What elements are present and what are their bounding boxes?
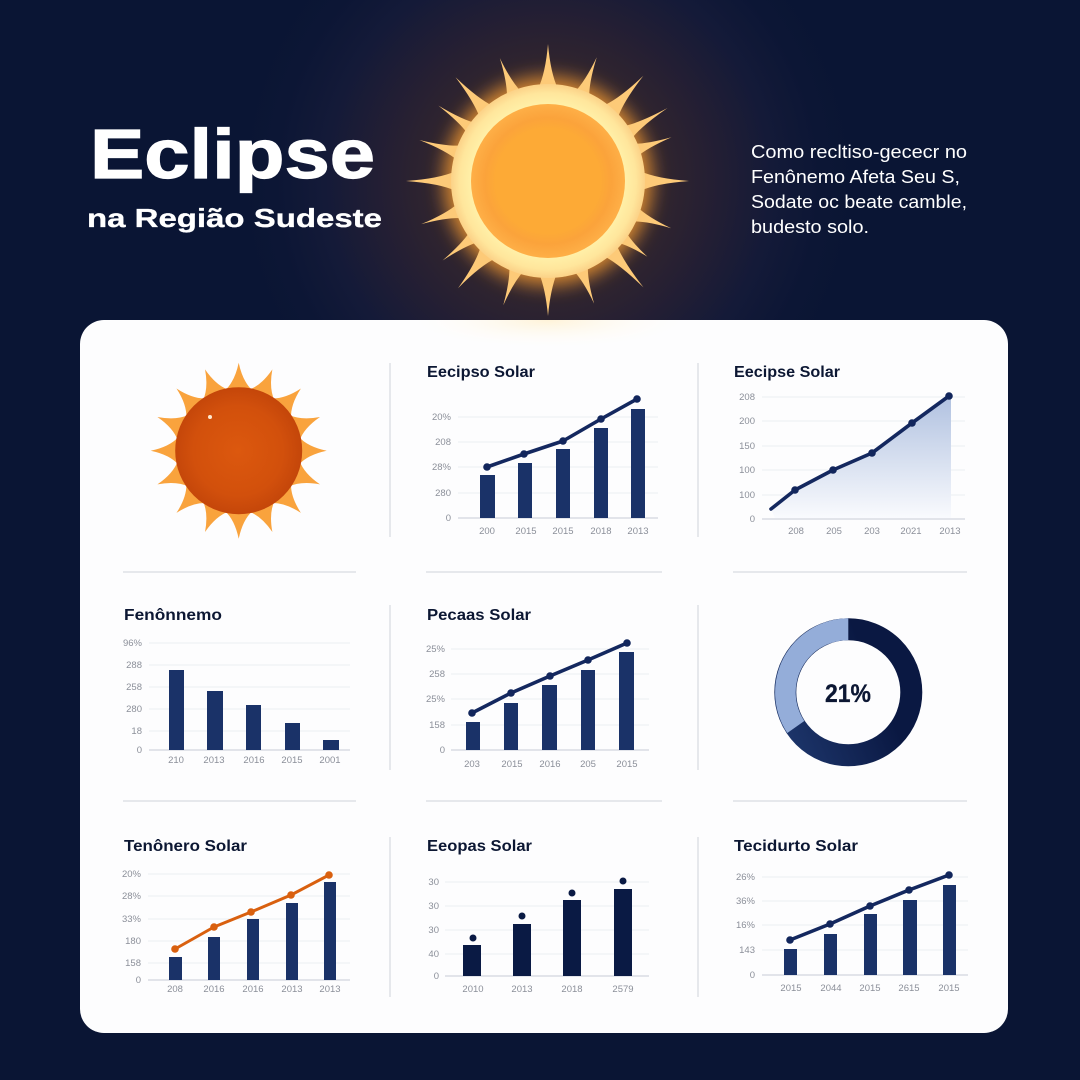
y axis labels: 280 (435, 488, 451, 499)
y axis labels: 0 (446, 513, 451, 524)
x axis labels: 2015 (501, 759, 523, 770)
chart title: Eecipso Solar (427, 364, 535, 381)
y axis labels: 0 (136, 975, 141, 986)
x axis labels: 2016 (539, 759, 561, 770)
subtitle: na Região Sudeste (87, 203, 382, 233)
chart: Tecidurto Solar (734, 838, 968, 994)
y axis labels: 0 (434, 971, 439, 982)
y axis labels: 20% (432, 412, 452, 423)
y axis labels: 288 (126, 660, 142, 671)
x axis labels: 203 (864, 526, 880, 537)
x axis labels (167, 984, 341, 995)
x axis labels: 2015 (281, 755, 303, 766)
x axis labels: 2021 (900, 526, 922, 537)
intro text: Sodate oc beate camble, (751, 192, 967, 212)
bars (466, 652, 634, 750)
chart: Eeopas Solar (427, 838, 649, 995)
y axis labels: 26% (736, 872, 756, 883)
y axis labels: 25% (426, 644, 446, 655)
chart title: Fenônnemo (124, 607, 222, 624)
y axis labels: 96% (123, 638, 143, 649)
x axis labels: 205 (580, 759, 596, 770)
y axis labels (122, 869, 142, 986)
x axis labels: 2013 (281, 984, 303, 995)
y axis labels: 0 (750, 514, 755, 525)
trend line (483, 395, 641, 471)
x axis labels: 2016 (242, 984, 264, 995)
title: Eclipse: Eclipse (90, 115, 375, 193)
x axis labels: 2013 (627, 526, 649, 537)
y axis labels: 20% (122, 869, 142, 880)
intro text (751, 142, 967, 237)
x axis labels: 2018 (561, 984, 583, 995)
trend line (771, 392, 953, 509)
bars (169, 882, 336, 980)
y axis labels: 258 (429, 669, 445, 680)
y axis labels: 0 (137, 745, 142, 756)
x axis labels (788, 526, 961, 537)
intro text: Fenônemo Afeta Seu S, (751, 167, 960, 187)
chart title: Pecaas Solar (427, 607, 531, 624)
chart: Tenônero Solar (122, 838, 350, 995)
y axis labels: 150 (739, 441, 755, 452)
x axis labels: 2018 (590, 526, 612, 537)
y axis labels: 36% (736, 896, 756, 907)
y axis labels: 280 (126, 704, 142, 715)
x axis labels: 2015 (515, 526, 537, 537)
y axis labels: 208 (739, 392, 755, 403)
y axis labels: 30 (428, 877, 439, 888)
chart: Fenônnemo (123, 607, 350, 766)
y axis labels: 28% (122, 891, 142, 902)
bars (784, 885, 956, 975)
y axis labels (736, 872, 756, 981)
intro text: Como recltiso-gececr no (751, 142, 967, 162)
y axis labels (428, 877, 439, 982)
y axis labels: 30 (428, 925, 439, 936)
chart: Pecaas Solar (426, 607, 649, 770)
trend line (468, 639, 631, 717)
y axis labels: 208 (435, 437, 451, 448)
x axis labels: 2013 (319, 984, 341, 995)
y axis labels: 200 (739, 416, 755, 427)
y axis labels: 16% (736, 920, 756, 931)
y axis labels: 0 (440, 745, 445, 756)
x axis labels: 210 (168, 755, 184, 766)
bars (169, 670, 339, 750)
chart title: Eeopas Solar (427, 838, 532, 855)
icon: orange sun (151, 363, 327, 539)
y axis labels (739, 392, 755, 525)
y axis labels: 158 (125, 958, 141, 969)
y axis labels: 258 (126, 682, 142, 693)
chart title: Tenônero Solar (124, 838, 247, 855)
chart title: Eecipse Solar (734, 364, 840, 381)
x axis labels: 2015 (552, 526, 574, 537)
y axis labels (432, 412, 452, 524)
y axis labels: 100 (739, 465, 755, 476)
x axis labels: 2001 (319, 755, 341, 766)
x axis labels: 200 (479, 526, 495, 537)
x axis labels: 2044 (820, 983, 842, 994)
x axis labels (168, 755, 341, 766)
x axis labels: 208 (788, 526, 804, 537)
x axis labels: 2015 (938, 983, 960, 994)
x axis labels: 2016 (243, 755, 265, 766)
x axis labels: 2013 (203, 755, 225, 766)
y axis labels: 180 (125, 936, 141, 947)
x axis labels: 2010 (462, 984, 484, 995)
chart: Eecipso Solar (427, 364, 658, 537)
area fill (771, 396, 951, 518)
x axis labels (462, 984, 634, 995)
intro text: budesto solo. (751, 217, 869, 237)
x axis labels: 208 (167, 984, 183, 995)
y axis labels: 28% (432, 462, 452, 473)
panel: white card (80, 320, 1008, 1033)
x axis labels: 2615 (898, 983, 920, 994)
x axis labels: 2013 (939, 526, 961, 537)
y axis labels: 158 (429, 720, 445, 731)
x axis labels: 2579 (612, 984, 634, 995)
bars (463, 889, 632, 976)
y axis labels: 18 (131, 726, 142, 737)
x axis labels: 2013 (511, 984, 533, 995)
chart: donut 21% (775, 618, 911, 755)
y axis labels: 0 (750, 970, 755, 981)
orange trend line (171, 871, 333, 953)
icon: glowing sun (406, 44, 689, 316)
x axis labels: 203 (464, 759, 480, 770)
x axis labels (479, 526, 649, 537)
markers (470, 878, 626, 942)
chart title: Tecidurto Solar (734, 838, 858, 855)
y axis labels (123, 638, 143, 756)
y axis labels: 30 (428, 901, 439, 912)
x axis labels: 2015 (859, 983, 881, 994)
chart: Eecipse Solar area (734, 364, 965, 537)
y axis labels: 25% (426, 694, 446, 705)
y axis labels (426, 644, 446, 756)
y axis labels: 33% (122, 914, 142, 925)
x axis labels: 2015 (616, 759, 638, 770)
trend line (786, 871, 953, 944)
x axis labels: 2016 (203, 984, 225, 995)
x axis labels (464, 759, 638, 770)
x axis labels (780, 983, 960, 994)
y axis labels: 40 (428, 949, 439, 960)
donut value: 21% (825, 680, 871, 708)
x axis labels: 2015 (780, 983, 802, 994)
bars (480, 409, 645, 518)
x axis labels: 205 (826, 526, 842, 537)
y axis labels: 100 (739, 490, 755, 501)
y axis labels: 143 (739, 945, 755, 956)
